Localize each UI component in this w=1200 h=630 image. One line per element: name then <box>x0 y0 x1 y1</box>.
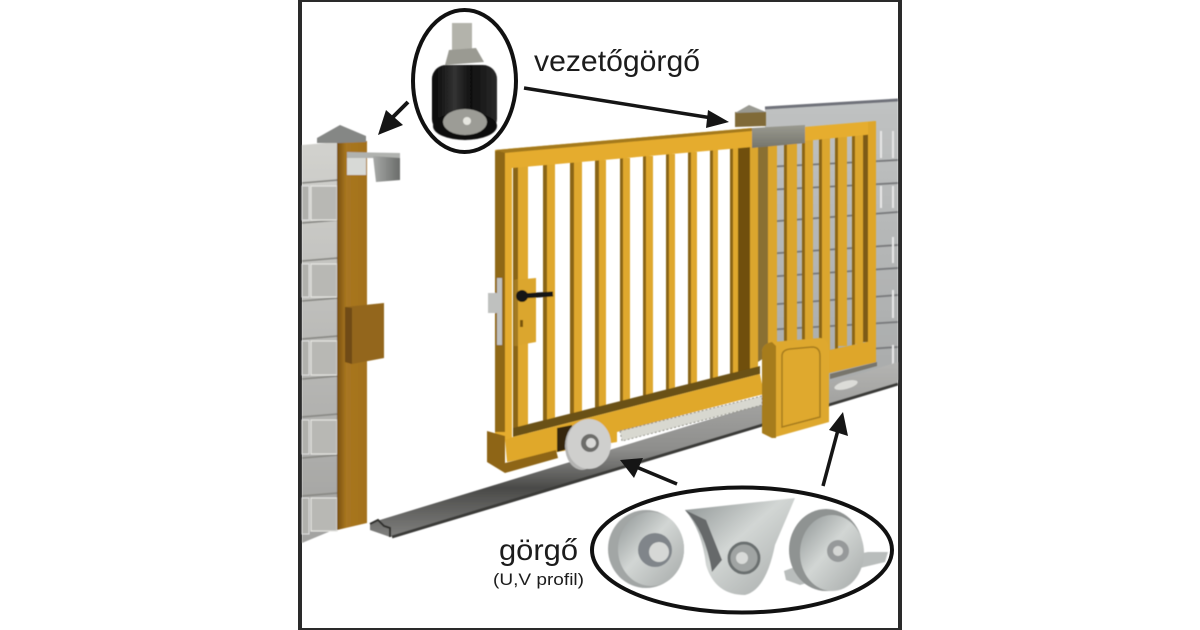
rear gate frame <box>804 121 875 141</box>
left foot <box>487 431 558 473</box>
top guide housing <box>752 125 805 148</box>
door lock <box>488 278 553 346</box>
picture frame <box>300 0 900 630</box>
roller photo two <box>685 498 795 595</box>
callout: guide roller <box>413 10 516 152</box>
right post cap <box>735 105 766 127</box>
motor housing <box>762 338 829 438</box>
toothed rack <box>620 396 762 441</box>
dark overlap column <box>738 146 752 372</box>
bottom rail of gate <box>513 366 760 437</box>
label: profile types: (U,V profil) <box>493 570 584 589</box>
guide roller photo <box>432 23 497 140</box>
arrow: to left keeper <box>378 102 408 135</box>
label: roller: görgő <box>499 534 578 567</box>
roller photo three <box>784 509 888 591</box>
main gate bars <box>513 148 733 434</box>
callout ring <box>413 10 516 152</box>
lock box <box>345 303 384 364</box>
arrow: to rear wheel <box>823 412 848 486</box>
ground rail <box>370 362 898 537</box>
callout ring <box>592 488 892 612</box>
callout: ground rollers <box>592 488 892 612</box>
ground roller <box>565 419 611 470</box>
heading: guide roller label: vezetőgörgő <box>534 45 700 78</box>
left wall and post <box>302 125 400 543</box>
arrow: to ground roller <box>620 458 677 484</box>
roller photo one <box>608 510 684 588</box>
right wall <box>765 100 898 402</box>
left brick wall <box>302 142 338 543</box>
arrow: to gate top <box>524 88 729 128</box>
rear gate shadow strip and wheel <box>830 362 877 392</box>
left post <box>337 141 367 530</box>
sliding gate <box>487 105 877 473</box>
keeper bracket <box>347 152 400 182</box>
post cap <box>317 125 366 143</box>
main gate frame <box>495 128 752 440</box>
rear gate bars <box>768 134 869 351</box>
